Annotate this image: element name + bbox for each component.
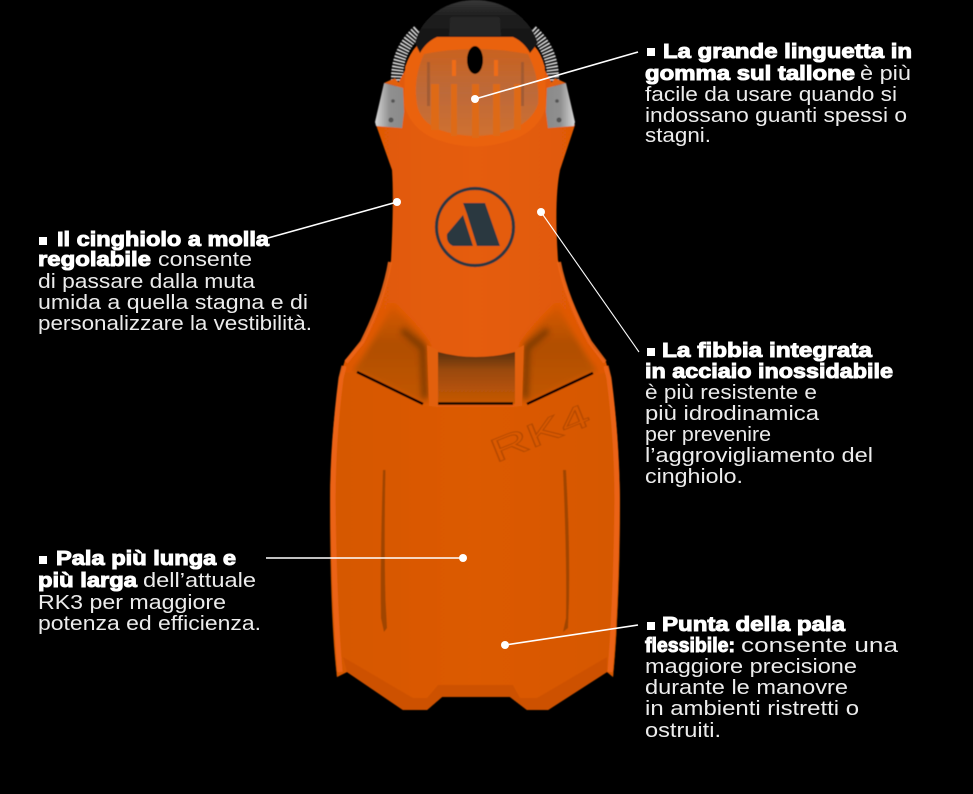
heel slot xyxy=(467,46,483,74)
text: buckle xyxy=(645,339,893,488)
text: buckle: l’aggrovigliamento del xyxy=(645,444,873,467)
left vent xyxy=(352,305,428,405)
text: spring strap: consente xyxy=(158,248,252,271)
text: blade tip: in ambienti ristretti o xyxy=(645,697,859,720)
text: spring strap: umida a quella stagna e di xyxy=(38,291,308,314)
text: heel tab: indossano guanti spessi o xyxy=(645,104,907,127)
foot pocket interior xyxy=(416,49,538,138)
text: heel tab: è più xyxy=(860,62,911,85)
illustration: orange diving fin xyxy=(330,0,620,710)
text: buckle: più idrodinamica xyxy=(645,402,820,425)
text: buckle: cinghiolo. xyxy=(645,465,743,488)
callout marker: spring strap xyxy=(268,198,401,238)
text: blade tip: Punta della pala xyxy=(662,613,846,636)
right vent xyxy=(522,305,598,405)
text: spring strap xyxy=(38,228,312,335)
callout marker: heel tab xyxy=(471,52,638,103)
text: buckle: in acciaio inossidabile xyxy=(645,360,893,383)
text: blade: Pala più lunga e xyxy=(56,547,236,570)
text: spring strap: personalizzare la vestibilità. xyxy=(38,312,312,335)
text: blade tip: consente una xyxy=(741,634,899,657)
right rib groove xyxy=(563,470,569,632)
text: blade: dell’attuale xyxy=(143,569,256,592)
text: blade tip xyxy=(645,613,899,742)
tip shading xyxy=(343,657,607,710)
blade xyxy=(330,372,620,710)
struts xyxy=(427,345,524,407)
left rib groove xyxy=(381,470,387,632)
slots xyxy=(357,372,593,404)
text: blade tip: maggiore precisione xyxy=(645,655,857,678)
embossed model mark: RK4 xyxy=(485,396,595,469)
text: buckle: è più resistente e xyxy=(645,381,817,404)
metal buckles xyxy=(375,78,575,128)
text: heel tab xyxy=(645,40,912,147)
logo xyxy=(436,188,514,266)
text: blade tip: ostruiti. xyxy=(645,719,721,742)
heel strap xyxy=(415,0,538,53)
icon: steel springs xyxy=(397,30,553,84)
text: blade: più larga xyxy=(38,569,138,592)
text: spring strap: di passare dalla muta xyxy=(38,270,256,293)
callout marker: blade tip xyxy=(501,625,638,649)
text: heel tab: facile da usare quando si xyxy=(645,83,897,106)
text: heel tab: La grande linguetta in xyxy=(663,40,912,63)
text: spring strap: Il cinghiolo a molla xyxy=(57,228,270,251)
text: heel tab: gomma sul tallone xyxy=(645,62,855,85)
text: spring strap: regolabile xyxy=(38,248,151,271)
blade edge highlights xyxy=(333,262,617,672)
text: blade tip: durante le manovre xyxy=(645,676,848,699)
foot pocket rim xyxy=(404,37,546,146)
center vent xyxy=(438,352,515,404)
text: blade xyxy=(38,547,261,635)
text: heel tab: stagni. xyxy=(645,124,711,147)
text: blade tip: flessibile: xyxy=(645,634,735,657)
callout lines and dots xyxy=(266,52,639,649)
text: blade: potenza ed efficienza. xyxy=(38,612,261,635)
callout marker: buckle xyxy=(537,208,639,352)
text: buckle: La fibbia integrata xyxy=(662,339,873,362)
text: buckle: per prevenire xyxy=(645,423,771,446)
text: blade: RK3 per maggiore xyxy=(38,591,226,614)
fin foot pocket and blade body xyxy=(330,70,620,710)
callout marker: blade xyxy=(266,554,467,562)
